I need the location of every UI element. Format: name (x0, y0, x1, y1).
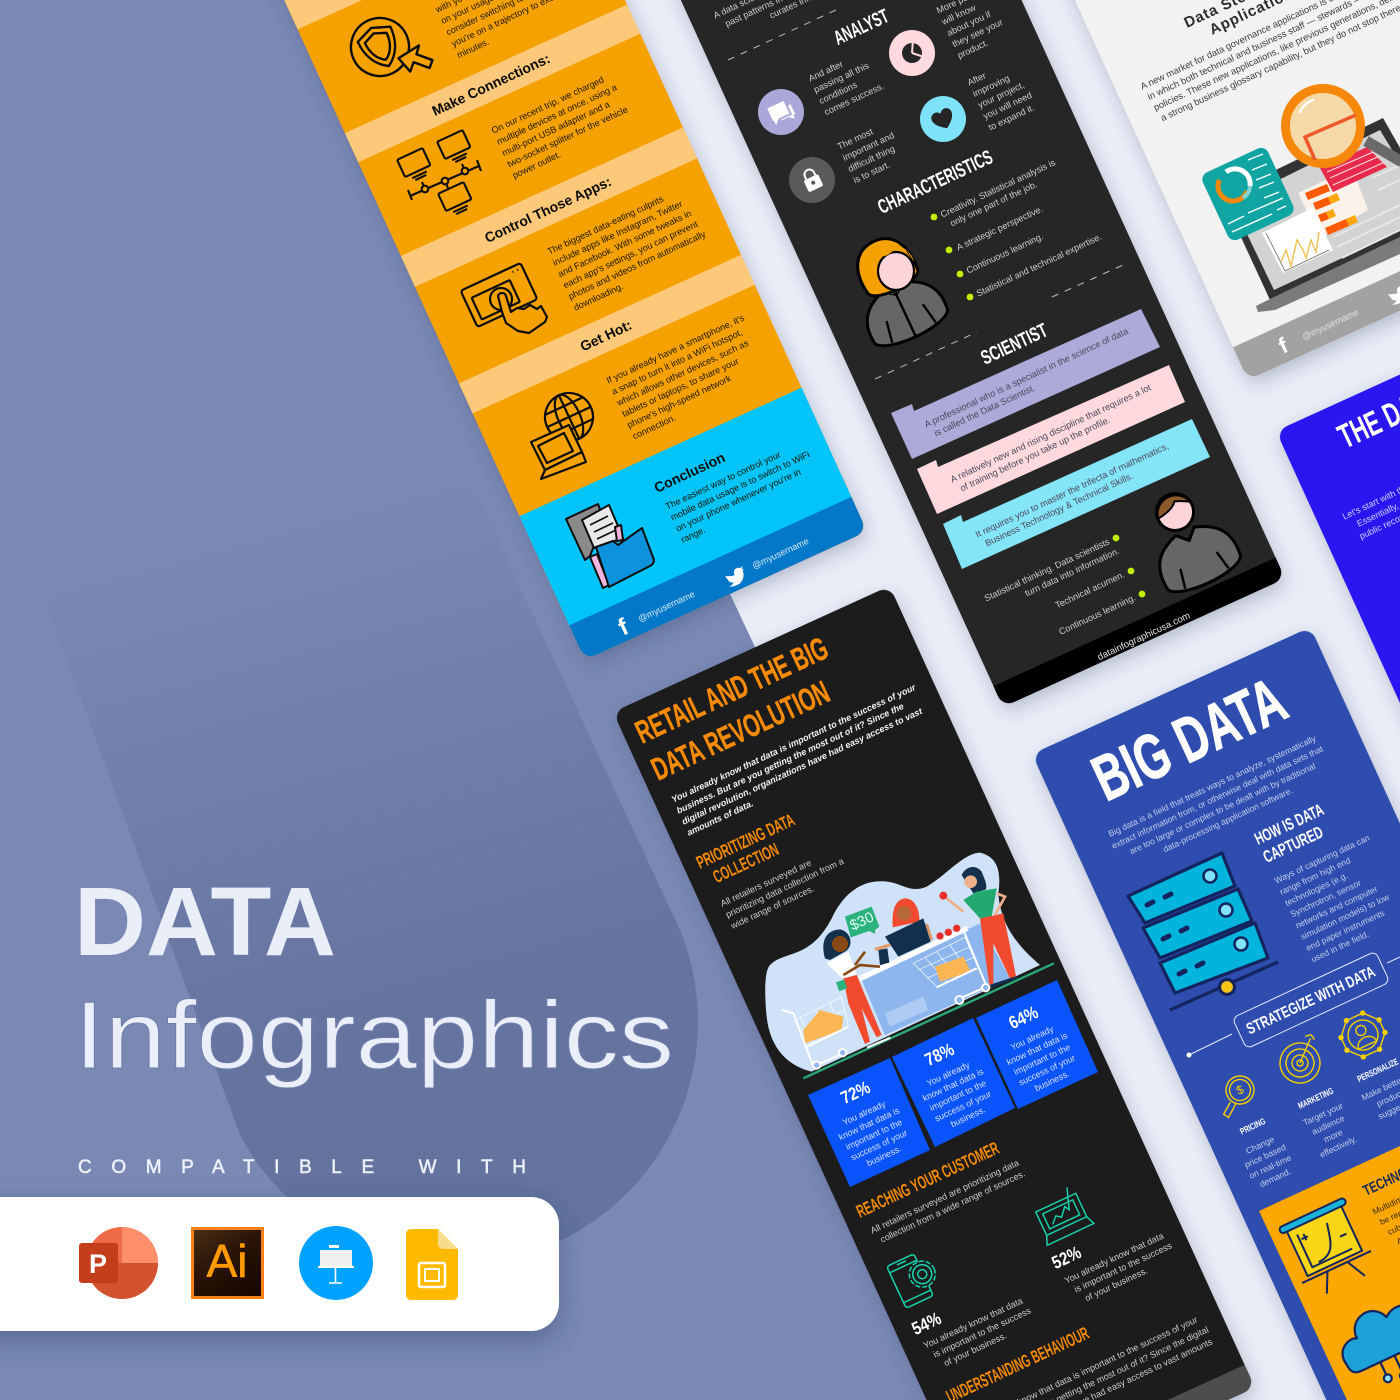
text: characteristics list: only one part of the job. (948, 179, 1039, 228)
stat text: business. (949, 1104, 987, 1129)
text: 52: of your business. (1083, 1265, 1149, 1303)
section bands (284, 0, 755, 413)
heading: how is data captured: CAPTURED (1260, 822, 1326, 867)
heading: Scientist: SCIENTIST (978, 320, 1051, 370)
text: get hot: which allows other devices, such as (614, 338, 750, 408)
text: after improving: improving (971, 73, 1011, 99)
connector dot (1186, 1052, 1192, 1058)
text: the most important: The most (836, 126, 875, 152)
cart left (782, 997, 848, 1069)
icon: target cursor (341, 3, 435, 96)
text: make connections: multiple devices at once, using a (495, 82, 619, 147)
title: DATA: DATA (74, 867, 336, 976)
icon: cloud network (1330, 1289, 1400, 1399)
text: how captured: range from high end (1278, 855, 1352, 897)
text: characteristics list: Statistical and technical expertise. (975, 232, 1103, 299)
text: more people: they see your (951, 17, 1004, 49)
text: make connections: On our recent trip, we charged (490, 75, 605, 136)
handle (1366, 141, 1400, 162)
conclusion section (519, 388, 853, 630)
dashed line (875, 332, 977, 379)
icon: pie (889, 30, 935, 76)
text: characteristics list: A strategic perspective. (955, 204, 1044, 253)
text: marketing: more (1322, 1127, 1344, 1144)
text: marketing: effectively. (1318, 1134, 1358, 1160)
ribbon: pink (917, 365, 1185, 514)
text: big data intro: Big data is a field that treats ways to analyze, systematically (1107, 733, 1318, 839)
icon: male scientist (1148, 487, 1246, 600)
heading: Make Connections: Make Connections: (429, 50, 552, 119)
text: scientist list (983, 534, 1137, 637)
card footer (569, 497, 867, 660)
text: marketing: Target your (1301, 1100, 1345, 1128)
text: facebook handle: @myusername (637, 589, 696, 624)
left blue-grey background panel (0, 0, 1110, 1400)
text: ribbon cyan: Business Technology & Technical Skills. (983, 471, 1135, 548)
stat value: 72% (838, 1077, 873, 1108)
text: pricing: demand. (1258, 1166, 1292, 1189)
value: 54%: 54% (909, 1308, 944, 1339)
icon: heart (920, 96, 966, 142)
monitor (885, 918, 931, 957)
cart right (913, 930, 989, 1004)
bar segments (1326, 193, 1358, 226)
text: ribbon cyan: It requires you to master the trifecta of mathematics, (974, 441, 1170, 540)
infographic card: retail and the big data revolution (dark) (613, 586, 1255, 1400)
text: how captured: simulation models) to low (1299, 892, 1391, 942)
icon: connected monitors (397, 130, 481, 217)
text: the most important: is to start. (852, 160, 892, 185)
text: and after: And after (807, 59, 845, 84)
text: more people: will know (939, 2, 978, 27)
text: retail intro: You already know that data is important to the success of your (670, 682, 918, 805)
text: twitter handle: @myusername (751, 536, 810, 571)
stat text: success of your (849, 1128, 909, 1163)
text: 52: You already know that data (1063, 1231, 1165, 1286)
text: get hot: phone's high-speed network (626, 373, 733, 430)
card body (671, 0, 1285, 707)
laptop (1222, 118, 1400, 300)
text: retail intro: business. But are you getting the most out of it? Since the (675, 701, 905, 816)
title: big data: BIG DATA (1081, 663, 1297, 815)
bubble (845, 907, 879, 937)
text: characteristics list: Continuous learning. (965, 231, 1045, 276)
stat text: important to the (844, 1117, 904, 1152)
stat box: 64% (976, 980, 1098, 1109)
illustration: retail checkout (765, 853, 1054, 1078)
title: retail: RETAIL AND THE BIG (630, 630, 833, 750)
text: retail intro: digital revolution, organizations have had easy access to vast (680, 706, 925, 827)
icon: presentation board (1277, 1197, 1379, 1301)
customer left (823, 929, 891, 1049)
stat box: 78% (892, 1018, 1015, 1147)
stat value: 64% (1006, 1002, 1041, 1033)
icon: server stack (1128, 853, 1278, 1010)
stat text: You already (841, 1098, 888, 1127)
icon: facebook: f (1275, 332, 1292, 359)
text: big data intro: extract information from, or otherwise deal with data sets that (1110, 743, 1325, 851)
icon: Illustrator: Ai (207, 1235, 247, 1287)
stat text: You already (925, 1059, 972, 1088)
text: control apps: photos and videos from automatically (567, 229, 708, 301)
text: big data intro: are too large or complex to be dealt with by traditional (1128, 761, 1317, 856)
stat text: important to the (1012, 1042, 1072, 1077)
text: retail intro: amounts of data. (685, 798, 755, 838)
title: revolution: DATA REVOLUTION (646, 674, 835, 787)
cashier (892, 898, 919, 927)
stat text: know that data is (837, 1105, 902, 1142)
text: scientist list: Continuous learning. (1057, 592, 1137, 637)
decorative rounded band (0, 340, 698, 1265)
icon: twitter (723, 566, 749, 588)
panel: technology section (1259, 1146, 1400, 1400)
teal card (1200, 145, 1296, 243)
ground line (803, 963, 1054, 1078)
text: intro paragraph: minutes. (455, 37, 491, 60)
text: characteristics list: Creativity. Statistical analysis is (939, 157, 1057, 220)
card footer (1233, 219, 1400, 380)
stat value: 78% (922, 1039, 957, 1070)
callout: strategize with data (1186, 951, 1400, 1058)
stat text: You already (1009, 1023, 1056, 1052)
magnifier (1286, 88, 1360, 164)
text: 54: is important to the success (932, 1305, 1033, 1360)
red card (1320, 147, 1387, 192)
connector right (1387, 957, 1400, 963)
stat text: business. (865, 1143, 903, 1168)
text: compatible with: COMPATIBLE WITH (78, 1157, 526, 1178)
connector left (1189, 1034, 1232, 1055)
text: conclusion: The easiest way to control your (664, 449, 782, 512)
heading: Control Those Apps: Control Those Apps: (482, 173, 614, 246)
icon: touch screen (461, 263, 547, 333)
illustration: laptop analytics (1200, 88, 1400, 312)
text: handle: @myusername (1301, 307, 1360, 342)
label: marketing: MARKETING (1296, 1086, 1335, 1111)
stat text: business. (1033, 1068, 1071, 1093)
blob (765, 853, 1040, 1072)
text: 54: You already know that data (922, 1296, 1024, 1351)
card footer (968, 1365, 1255, 1400)
text: ribbon pink: A relatively new and rising discipline that requires a lot (949, 382, 1153, 485)
icon: pricing: $ (1234, 1082, 1246, 1098)
ribbon: purple (891, 309, 1160, 459)
stat text: important to the (928, 1078, 988, 1113)
text: get hot: a snap to turn it into a WiFi hotspot, (610, 327, 744, 397)
heading: Conclusion: Conclusion (652, 449, 727, 496)
text: after improving: to expand it. (987, 102, 1036, 132)
text: prioritizing: prioritizing data collection from a (724, 856, 845, 920)
heading: prioritizing data collection: PRIORITIZING DATA (693, 810, 798, 873)
icon: personalize (1333, 1005, 1393, 1065)
icon: facebook: f (614, 613, 634, 641)
text: 52: is important to the success (1073, 1240, 1174, 1295)
text: control apps: each app's settings, you can prevent (562, 219, 700, 290)
heading: how is data captured: HOW IS DATA (1252, 800, 1327, 849)
text: control apps: The biggest data-eating culprits (546, 194, 666, 257)
ribbon: cyan (943, 419, 1210, 569)
text: big data intro: data-processing application software. (1161, 785, 1294, 854)
stat text: success of your (1017, 1053, 1077, 1088)
text: how captured: used in the field. (1310, 929, 1371, 964)
bullets (931, 214, 973, 300)
card body (1276, 302, 1400, 1159)
text: scientist list: Statistical thinking. Data scientists (983, 536, 1112, 603)
text: after improving: After (966, 70, 988, 88)
text: make connections: multi-port USB adapter and a (500, 99, 612, 158)
counter (862, 923, 1010, 1035)
text: prioritizing: wide range of sources. (728, 883, 816, 931)
illustration: retail checkout: $30 (848, 909, 877, 934)
text: the most important: important and (841, 130, 896, 163)
text: more people: about you if (945, 9, 993, 38)
infographic card: big data (blue) (1032, 627, 1400, 1400)
text: how captured: Ways of capturing data can (1273, 833, 1371, 886)
card body (613, 586, 1255, 1400)
text: reaching: collection from a wide range of sources. (879, 1168, 1027, 1245)
icon: Illustrator (192, 1228, 262, 1298)
text: and after: conditions (817, 79, 859, 106)
infographic card: data analyst vs scientist (dark) (671, 0, 1285, 707)
icon: twitter (1386, 284, 1400, 306)
title: Infographics: Infographics (74, 982, 674, 1089)
text: conclusion: mobile data usage is to switch to WiFi (669, 449, 811, 523)
text: get hot: tablets or laptops, to share your (620, 356, 740, 419)
text: how captured: end paper instruments (1304, 908, 1386, 953)
icon: Keynote (299, 1226, 373, 1300)
text: storytelling body: a strong business glossary capability, but they do not stop there. (1159, 1, 1400, 123)
heading: Get Hot: Get Hot: (577, 317, 634, 354)
stat text: know that data is (921, 1066, 986, 1103)
icon: laptop graph (1029, 1183, 1094, 1245)
icon: PowerPoint: P (89, 1249, 107, 1279)
text: ribbon purple: is called the Data Scientist. (932, 383, 1037, 438)
text: ribbon purple: A professional who is a specialist in the science of data (923, 326, 1131, 430)
icon: phone and gear (887, 1249, 944, 1308)
icon: marketing (1273, 1033, 1329, 1090)
card body (916, 0, 1400, 380)
stat text: know that data is (1005, 1030, 1070, 1067)
text: scientist list: Technical acumen. (1054, 569, 1126, 610)
bar chart card (1298, 168, 1368, 238)
text: control apps: include apps like Instagram, Twitter (551, 199, 684, 268)
text: pricing: Change (1244, 1134, 1276, 1156)
screen lines (1333, 165, 1400, 258)
text: 54: of your business. (942, 1330, 1008, 1368)
card body (253, 0, 867, 660)
text: and after: passing all this (812, 60, 871, 95)
text: scientist list: turn data into information. (1023, 546, 1121, 598)
text: get hot: If you already have a smartphone, it's (605, 313, 746, 386)
bullets (1113, 535, 1145, 597)
text: more people: product. (956, 38, 990, 60)
text: pricing: on real-time (1247, 1153, 1293, 1181)
stat box: 72% (808, 1058, 930, 1187)
icon: PowerPoint (79, 1227, 158, 1299)
card footer (993, 558, 1285, 707)
dashed line (728, 10, 836, 60)
text: characteristics list (939, 157, 1103, 299)
text: pricing: price based (1243, 1142, 1288, 1170)
text: conclusion: range. (679, 525, 707, 545)
heading: Characteristics: CHARACTERISTICS (875, 146, 996, 219)
text: control apps: and Facebook. With some tweaks in (556, 208, 693, 279)
text: after improving: you will need (982, 90, 1033, 121)
text: ribbon pink: of training before you take up the profile. (958, 415, 1112, 493)
text: control apps: downloading. (572, 281, 625, 313)
text: how captured: Synchrotron, sensor (1289, 878, 1363, 919)
text: the most important: difficult thing (846, 144, 896, 174)
line chart card (1262, 208, 1333, 273)
text: get hot: connection. (631, 413, 677, 441)
infographic card: data storytelling (light) (916, 0, 1400, 380)
text: reaching: All retailers surveyed are prioritizing data (869, 1158, 1020, 1236)
icon: pricing (1211, 1071, 1261, 1119)
customer right (947, 867, 1017, 988)
text: and after: comes success. (823, 81, 885, 117)
heading: reaching your customer: REACHING YOUR CUSTOMER (853, 1138, 1002, 1222)
text: make connections: two-socket splitter for the vehicle (506, 104, 629, 169)
icon: folder with documents (566, 504, 654, 588)
text: make connections: power outlet. (511, 149, 562, 180)
text: conclusion: on your phone whenever you're in (674, 467, 802, 534)
panel: compatible app icons (0, 1197, 559, 1331)
icon: globe and laptop (531, 385, 601, 479)
infographic card: the data (violet) (1276, 302, 1400, 1159)
dashed line (1052, 265, 1123, 297)
text: website: datainfographicusa.com (1096, 610, 1192, 663)
infographic card: mobile data tips (orange) (253, 0, 867, 660)
text: how captured: networks and computer (1294, 884, 1379, 930)
icon: chat (758, 89, 804, 135)
text: prioritizing: All retailers surveyed are (719, 858, 813, 909)
value: 52%: 52% (1049, 1242, 1084, 1273)
icon: Google Slides (406, 1229, 458, 1300)
label: pricing: PRICING (1238, 1116, 1267, 1137)
icon: lock (789, 157, 835, 203)
card body (1032, 627, 1400, 1400)
text: how captured: technologies (e.g. (1283, 870, 1349, 908)
text: marketing: audience (1310, 1113, 1346, 1137)
text: after improving: your project, (976, 80, 1026, 110)
apples (936, 892, 960, 940)
stat text: success of your (933, 1089, 993, 1124)
icon: female analyst (848, 229, 953, 354)
heading: prioritizing data collection: COLLECTION (710, 839, 782, 887)
